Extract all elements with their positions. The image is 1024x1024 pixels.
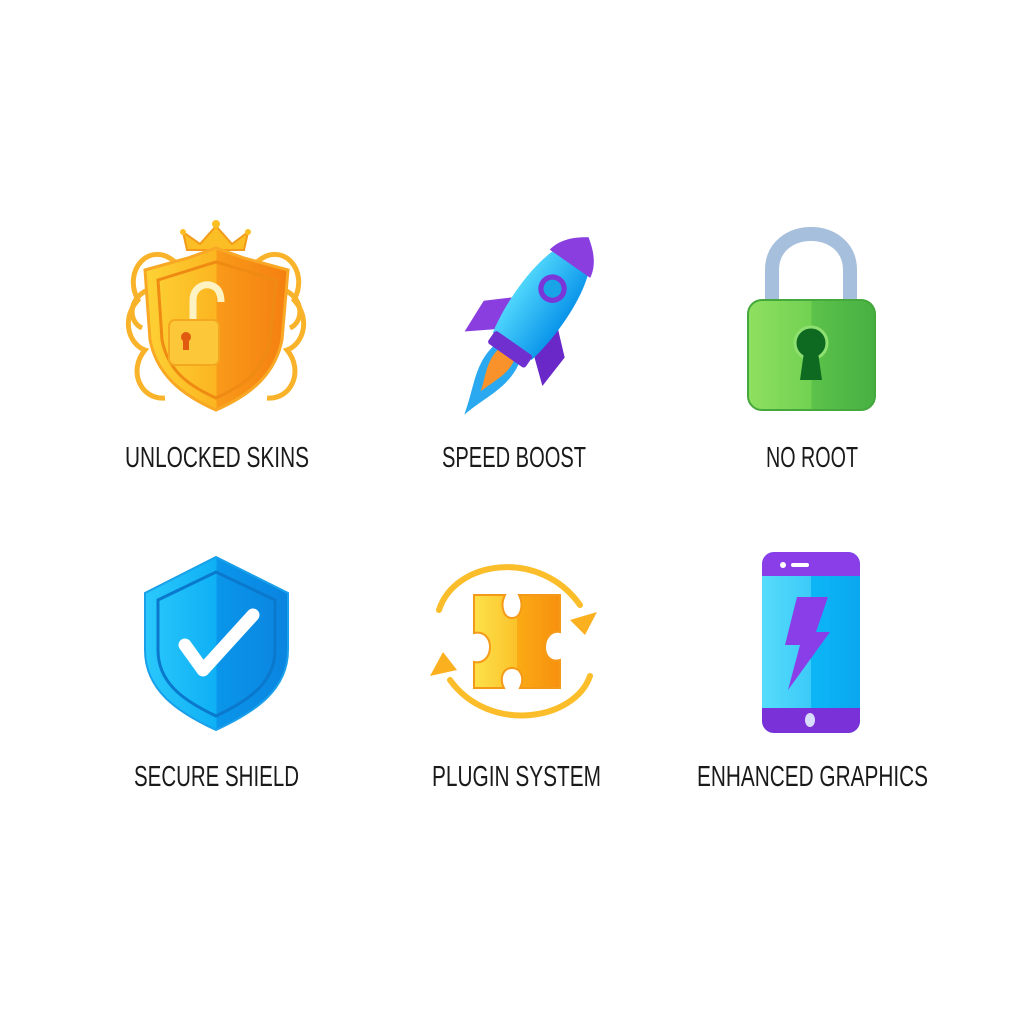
icon: rocket	[424, 209, 629, 443]
label: NO ROOT: NO ROOT	[766, 442, 858, 474]
icon: smartphone with lightning	[762, 552, 860, 733]
label: SPEED BOOST: SPEED BOOST	[442, 442, 586, 474]
label: PLUGIN SYSTEM: PLUGIN SYSTEM	[432, 761, 601, 793]
label: UNLOCKED SKINS: UNLOCKED SKINS	[125, 442, 309, 474]
icon: blue shield with checkmark	[145, 557, 288, 730]
icon: green padlock	[748, 234, 875, 410]
icon: puzzle piece with cycle arrows	[430, 567, 597, 715]
label: ENHANCED GRAPHICS: ENHANCED GRAPHICS	[697, 761, 928, 793]
icon: golden shield with unlocked padlock	[128, 220, 304, 410]
label: SECURE SHIELD: SECURE SHIELD	[134, 761, 299, 793]
